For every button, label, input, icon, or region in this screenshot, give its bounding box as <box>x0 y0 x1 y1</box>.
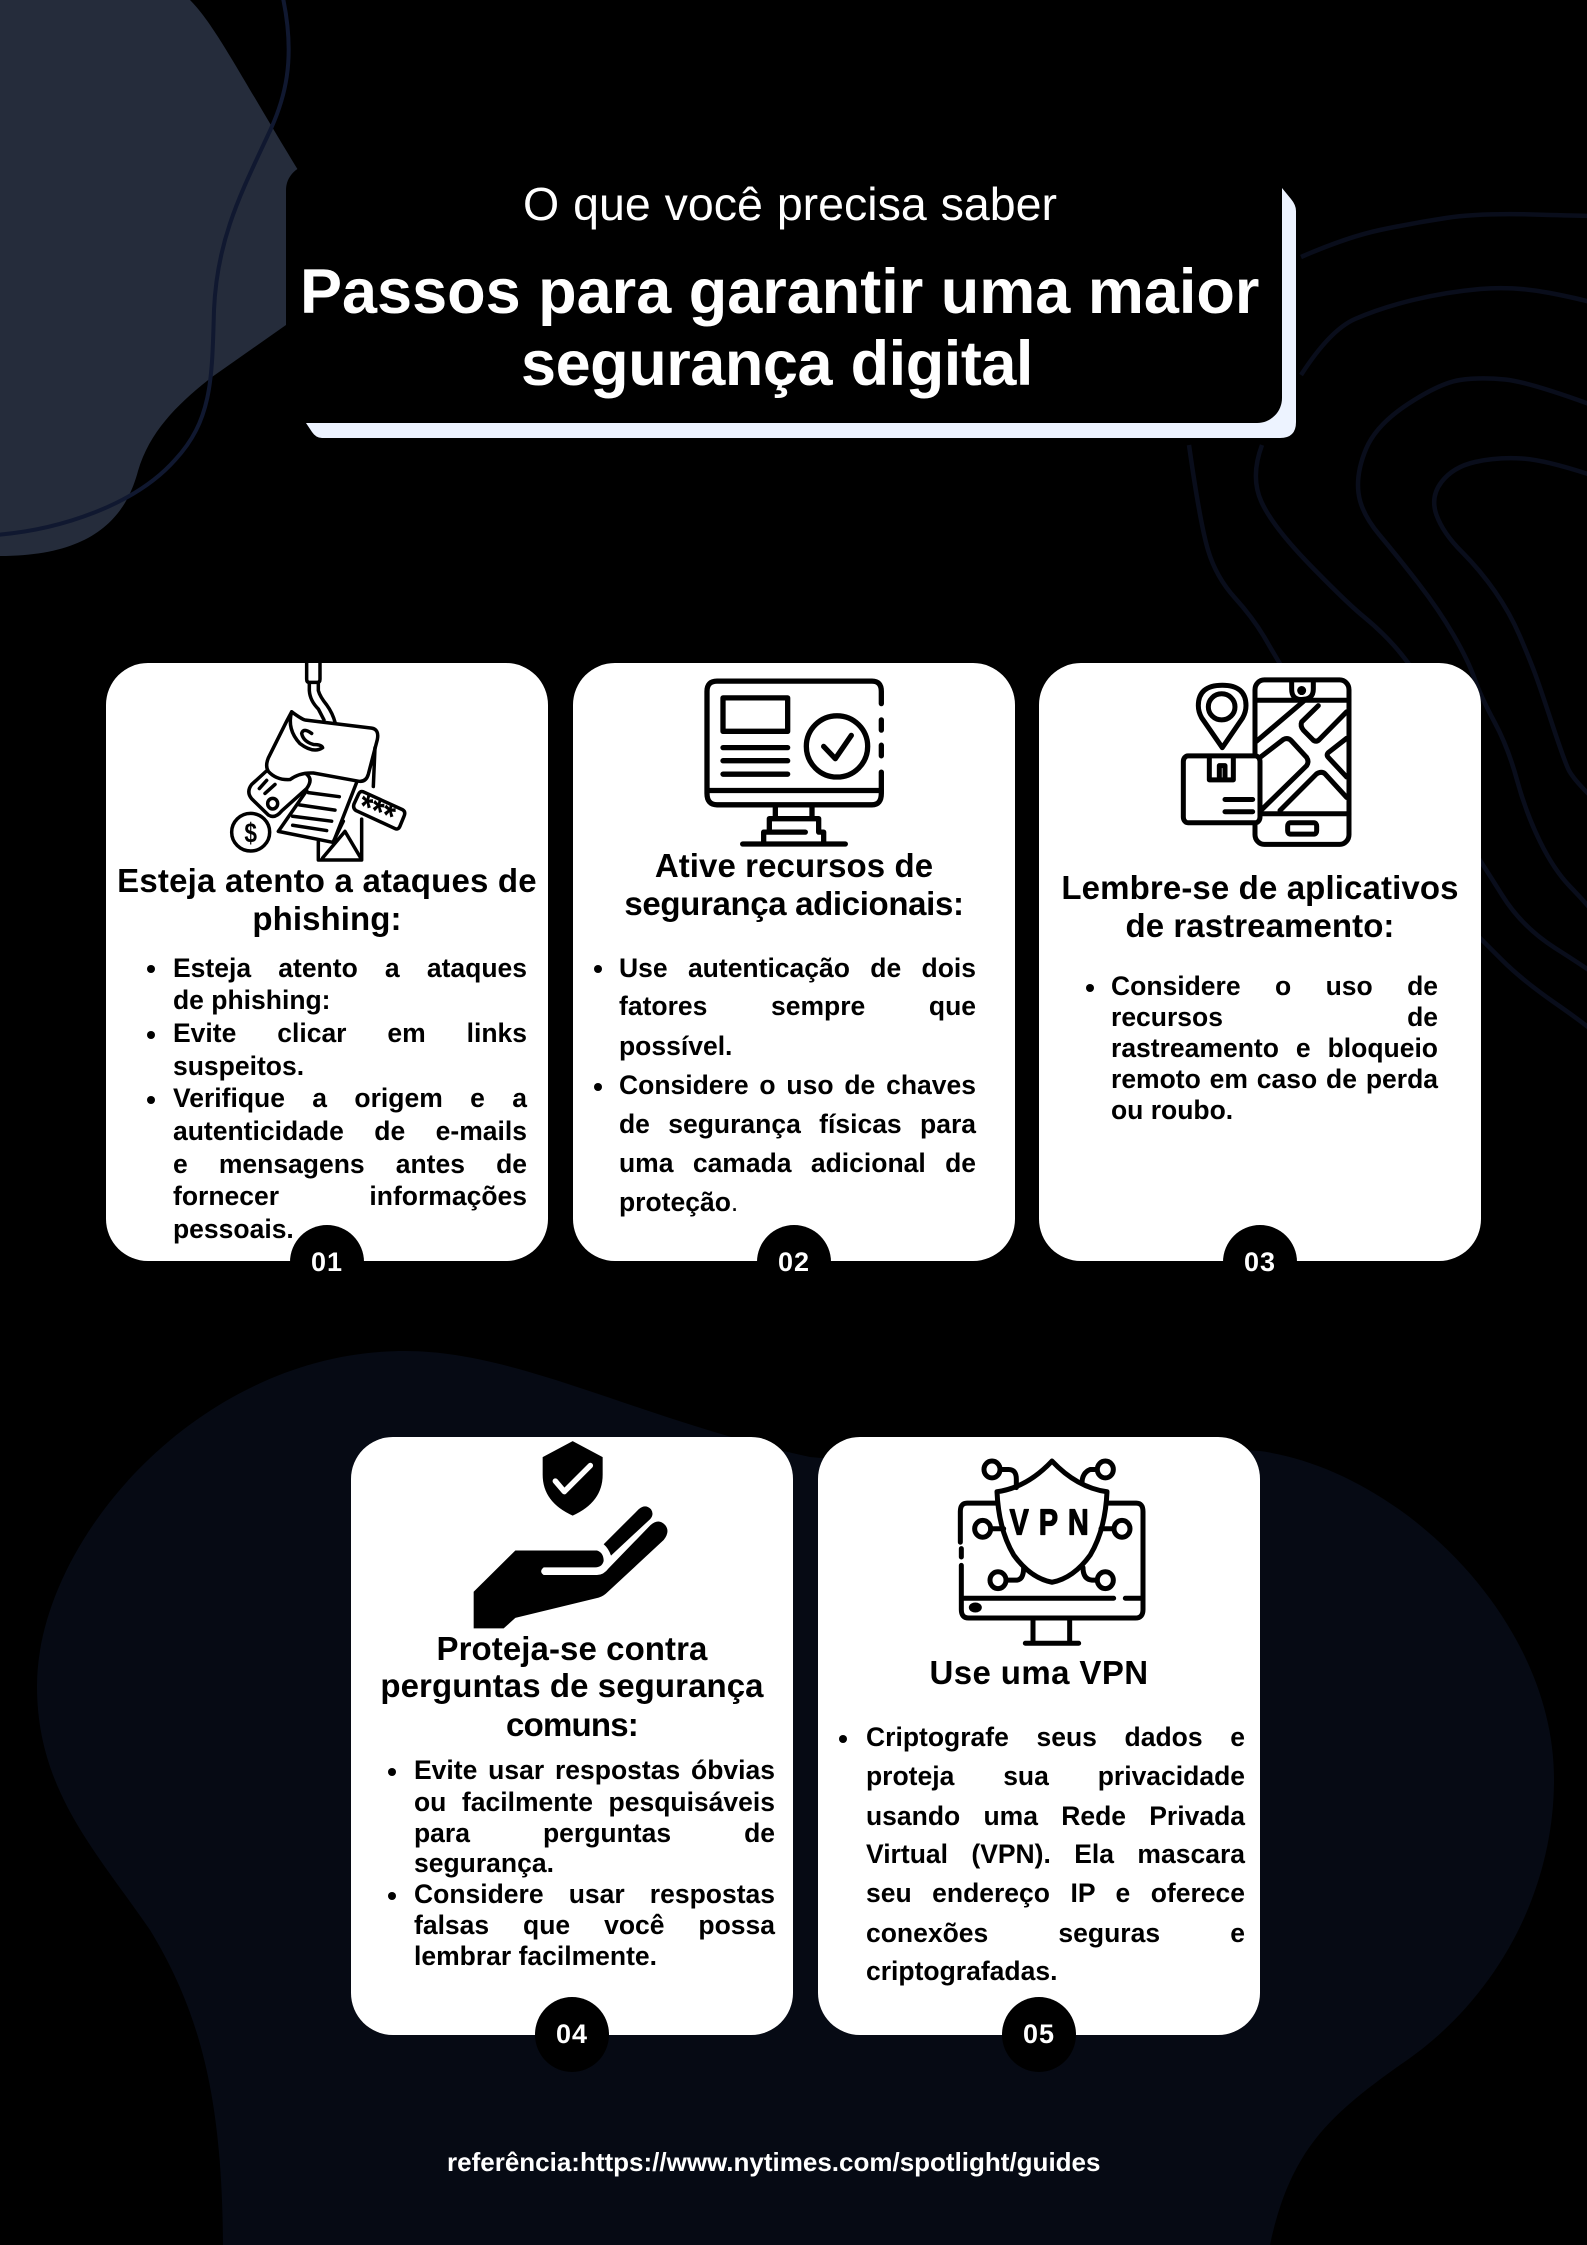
text block card 01: pessoais. <box>173 1214 294 1244</box>
text block card 02: possível. <box>619 1031 732 1061</box>
line: top left curve <box>0 0 289 535</box>
text block card 02: uma camada adicional de <box>619 1148 976 1178</box>
heading card 04 <box>380 1630 764 1743</box>
heading card 03: de rastreamento: <box>1125 907 1395 944</box>
header shadow shape <box>306 188 1296 438</box>
text block card 02: Considere o uso de chaves <box>619 1070 976 1100</box>
panel: card 05 VPN <box>818 1437 1260 2072</box>
heading card 02: Ative recursos de <box>655 846 933 884</box>
text block card 04: lembrar facilmente. <box>414 1941 657 1971</box>
blob: top left slate <box>0 0 300 556</box>
badge 02: 02 <box>778 1247 810 1277</box>
icon: phone map with pin and package <box>1180 677 1352 847</box>
blob: bottom dark navy <box>37 1351 1554 2245</box>
text block card 03: remoto em caso de perda <box>1111 1064 1438 1094</box>
text block card 04: segurança. <box>414 1848 554 1878</box>
icon: hand with shield <box>474 1441 668 1628</box>
text block card 02: fatores sempre que <box>619 991 976 1021</box>
icon: phishing hook with envelope: *** <box>355 786 400 839</box>
heading card 01: phishing: <box>252 900 402 937</box>
footer reference: referência:https://www.nytimes.com/spotlight/guides <box>447 2147 1100 2177</box>
text block card 04 <box>388 1755 776 1971</box>
text block card 05: proteja sua privacidade <box>866 1761 1245 1791</box>
text block card 04: Considere usar respostas <box>414 1879 775 1909</box>
icon: VPN shield monitor: VPN <box>1009 1501 1088 1542</box>
panel: card 04 security questions <box>351 1437 793 2072</box>
heading card 01 <box>117 862 537 937</box>
panel: card 03 tracking apps <box>1039 663 1481 1277</box>
heading card 04: Proteja-se contra <box>437 1630 707 1667</box>
title: segurança digital <box>521 329 1033 399</box>
card 04 background <box>351 1437 793 2035</box>
card 05 background <box>818 1437 1260 2035</box>
text block card 05: usando uma Rede Privada <box>866 1801 1245 1831</box>
text block card 01 <box>147 952 528 1244</box>
text block card 02: Use autenticação de dois <box>619 952 976 982</box>
heading card 01: Esteja atento a ataques de <box>117 862 537 899</box>
panel: card 02 security features <box>573 663 1015 1277</box>
text block card 02: proteção. <box>619 1187 738 1217</box>
text block card 03 <box>1086 971 1438 1125</box>
panel: card 01 phishing <box>106 663 548 1277</box>
text block card 01: de phishing: <box>173 985 331 1015</box>
card 02 background <box>573 663 1015 1261</box>
text block card 03: ou roubo. <box>1111 1095 1233 1125</box>
title <box>300 257 1259 399</box>
title: Passos para garantir uma maior <box>300 257 1259 327</box>
text block card 04: Evite usar respostas óbvias <box>414 1755 775 1785</box>
subtitle: O que você precisa saber <box>523 178 1057 230</box>
text block card 05: seu endereço IP e oferece <box>866 1878 1245 1908</box>
text block card 01: fornecer informações <box>173 1181 527 1211</box>
text block card 04: para perguntas de <box>414 1818 775 1848</box>
badge 04 <box>535 1997 609 2072</box>
text block card 05: Criptografe seus dados e <box>866 1722 1245 1752</box>
text block card 01: Evite clicar em links <box>173 1018 527 1048</box>
text block card 01: Esteja atento a ataques <box>173 952 527 982</box>
icon: monitor with check <box>704 678 884 847</box>
header panel <box>286 169 1296 438</box>
text block card 03: rastreamento e bloqueio <box>1111 1033 1438 1063</box>
heading card 04: perguntas de segurança <box>380 1667 764 1704</box>
badge 05 <box>1002 1997 1076 2072</box>
icon: VPN shield monitor <box>958 1458 1146 1646</box>
card 01 background <box>106 663 548 1261</box>
text block card 02 <box>594 952 976 1217</box>
badge 04: 04 <box>556 2019 588 2049</box>
text block card 01: suspeitos. <box>173 1050 304 1080</box>
text block card 05: criptografadas. <box>866 1956 1057 1986</box>
badge 01 <box>290 1225 364 1299</box>
icon: phishing hook with envelope <box>230 663 406 862</box>
heading card 04: comuns: <box>506 1706 638 1743</box>
text block card 05: Virtual (VPN). Ela mascara <box>866 1839 1245 1869</box>
text block card 01: e mensagens antes de <box>173 1148 527 1178</box>
text block card 01: Verifique a origem e a <box>173 1083 527 1113</box>
badge 03 <box>1223 1225 1297 1299</box>
text block card 04: ou facilmente pesquisáveis <box>414 1787 775 1817</box>
heading card 02 <box>624 846 964 922</box>
text block card 03: Considere o uso de <box>1111 971 1438 1001</box>
heading card 03 <box>1061 869 1459 944</box>
icon: phishing hook with envelope: $ <box>244 819 257 849</box>
header black box <box>286 165 1282 423</box>
text block card 04: falsas que você possa <box>414 1910 775 1940</box>
card 03 background <box>1039 663 1481 1261</box>
text block card 01: autenticidade de e-mails <box>173 1116 527 1146</box>
badge 05: 05 <box>1023 2019 1055 2049</box>
contour lines: right <box>1189 214 1587 1037</box>
heading card 03: Lembre-se de aplicativos <box>1061 869 1459 906</box>
badge 02 <box>757 1225 831 1299</box>
badge 03: 03 <box>1244 1247 1276 1277</box>
text block card 05 <box>839 1722 1246 1986</box>
text block card 03: recursos de <box>1111 1002 1438 1032</box>
heading card 02: segurança adicionais: <box>624 885 964 922</box>
text block card 02: de segurança físicas para <box>619 1109 976 1139</box>
heading card 05: Use uma VPN <box>930 1654 1148 1691</box>
text block card 05: conexões seguras e <box>866 1918 1245 1948</box>
badge 01: 01 <box>311 1247 343 1277</box>
